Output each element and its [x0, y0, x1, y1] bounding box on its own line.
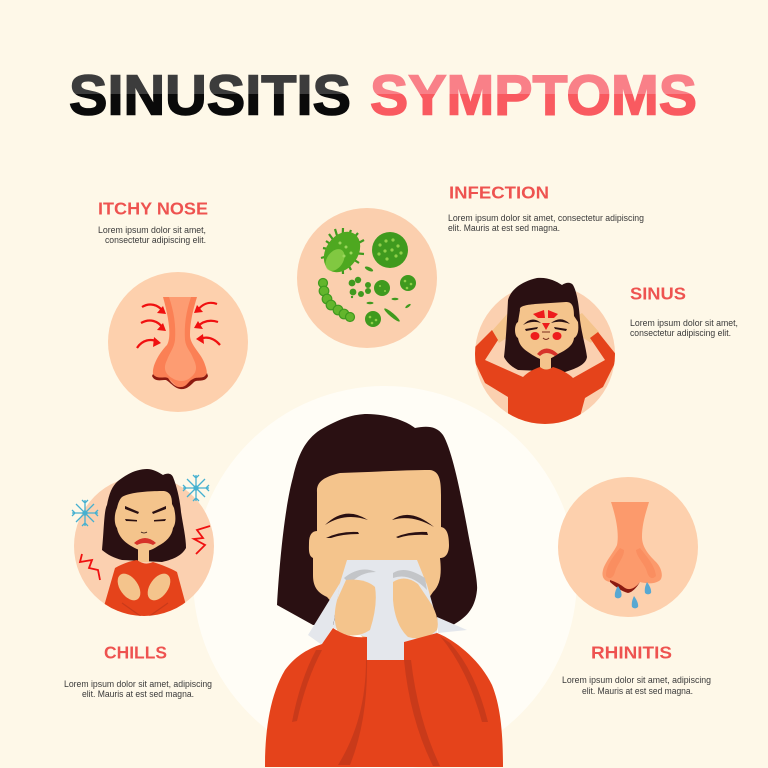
panel: infection text [448, 182, 644, 233]
eyes and brows [325, 514, 434, 538]
icon: bacteria chain [318, 278, 354, 322]
title: SYMPTOMS [370, 64, 697, 128]
panel: sinus text: consectetur adipiscing elit. [630, 328, 731, 338]
panel: itchy nose text: ITCHY NOSE [98, 198, 208, 218]
panel: sinus text: SINUS [630, 284, 686, 304]
panel: sinus text [630, 284, 738, 338]
panel: rhinitis text [562, 642, 711, 696]
tissue [333, 560, 437, 660]
icon: snowflakes [72, 475, 209, 526]
hair [277, 414, 477, 625]
panel: chills text: CHILLS [104, 642, 167, 662]
icon: small germs cluster [349, 265, 416, 327]
panel: itchy nose icon [108, 272, 248, 412]
icon: round germ [372, 232, 408, 268]
title [69, 64, 697, 128]
panel: sinus figure icon [470, 278, 618, 424]
title: SINUSITIS [69, 64, 351, 128]
panel: rhinitis icon [558, 477, 698, 617]
panel: chills figure icon [72, 469, 214, 620]
hands [335, 580, 376, 636]
panel: chills text [64, 642, 212, 699]
panel: rhinitis text: elit. Mauris at est sed magna. [582, 686, 693, 696]
panel: sinus text: Lorem ipsum dolor sit amet, [630, 318, 738, 328]
panel: itchy nose text: consectetur adipiscing elit. [105, 235, 206, 245]
panel: itchy nose text [98, 198, 208, 245]
face [309, 470, 449, 640]
sweater [265, 628, 503, 767]
panel: infection text: Lorem ipsum dolor sit amet, consectetur adipiscing [448, 213, 644, 223]
panel: infection text: INFECTION [449, 182, 549, 202]
panel: rhinitis text: Lorem ipsum dolor sit amet, adipiscing [562, 675, 711, 685]
panel: rhinitis text: RHINITIS [591, 642, 672, 662]
panel: infection icon [297, 208, 437, 348]
main figure: woman blowing nose [265, 414, 503, 767]
icon: spiky germ [316, 225, 368, 279]
panel: chills text: Lorem ipsum dolor sit amet, adipiscing [64, 679, 212, 689]
panel: chills text: elit. Mauris at est sed magna. [82, 689, 194, 699]
infographic canvas [64, 74, 738, 768]
tissue flaps [308, 583, 467, 645]
sweater folds [292, 636, 488, 766]
panel: infection text: elit. Mauris at est sed magna. [448, 223, 560, 233]
panel: itchy nose text: Lorem ipsum dolor sit amet, [98, 225, 206, 235]
